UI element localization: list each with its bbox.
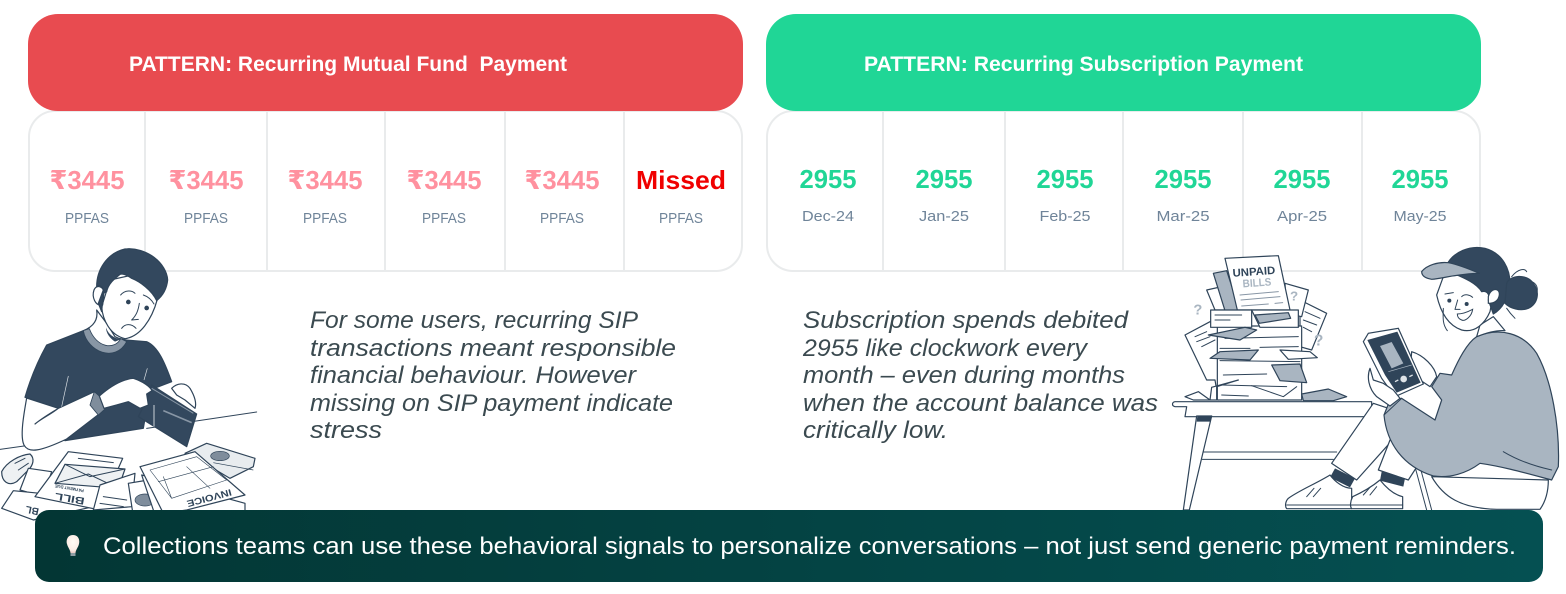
- text block: subscription insight: Subscription spends debited: [803, 307, 1129, 334]
- month cell 3: ₹3445: [288, 165, 362, 195]
- hips: [1432, 477, 1548, 509]
- bills and envelope: BILL: [54, 490, 86, 506]
- month cell Dec-24: 2955: [800, 164, 856, 194]
- heading: mutual fund pattern: PATTERN: Recurring Mutual Fund Payment: [129, 53, 567, 76]
- facial features: [1445, 293, 1473, 320]
- ear: [1488, 290, 1499, 303]
- arm left: [22, 392, 100, 450]
- phone with N logo and player: [1363, 328, 1423, 406]
- panel: subscription table: [767, 111, 1480, 271]
- month cell 1: PPFAS: [65, 210, 109, 227]
- month cell 4: [406, 165, 482, 227]
- icon: light bulb: [67, 535, 79, 556]
- neck: [83, 310, 126, 348]
- bills stack: [1185, 256, 1347, 401]
- month cell 2: PPFAS: [184, 210, 228, 227]
- bills stack: ?: [1193, 303, 1202, 319]
- shirt: [25, 331, 172, 441]
- month cell 2: ₹3445: [168, 165, 244, 195]
- table: [1172, 402, 1432, 510]
- month cell 4: ₹3445: [406, 165, 482, 195]
- ear: [93, 287, 104, 305]
- month cell Jan-25: Jan-25: [919, 208, 969, 225]
- month cell Feb-25: 2955: [1036, 164, 1094, 194]
- month cell 2: [168, 165, 244, 227]
- month cell Apr-25: 2955: [1274, 164, 1330, 194]
- stack of cash: [185, 443, 255, 478]
- month cell Apr-25: [1274, 164, 1330, 225]
- text block: subscription insight: [802, 307, 1158, 444]
- month cell Jan-25: [916, 164, 972, 225]
- text block: subscription insight: critically low.: [803, 417, 948, 444]
- month cell 1: ₹3445: [50, 165, 124, 195]
- text block: subscription insight: 2955 like clockwork every: [802, 335, 1089, 362]
- sweater: [1384, 332, 1559, 480]
- month cell Apr-25: Apr-25: [1277, 208, 1327, 225]
- face: [102, 273, 157, 339]
- phone hand right: [1410, 352, 1437, 387]
- bills and envelope: PAYMENT DUE: [54, 483, 84, 493]
- bills stack: BILLS: [1242, 276, 1272, 290]
- month cell Jan-25: 2955: [916, 164, 972, 194]
- neck and face: [1477, 317, 1505, 337]
- text block: SIP insight: missing on SIP payment indicate: [310, 390, 673, 417]
- month cell Feb-25: Feb-25: [1040, 208, 1090, 225]
- month cell Feb-25: [1036, 164, 1094, 225]
- hair: [97, 249, 168, 312]
- bills stack: UNPAID: [1232, 265, 1276, 280]
- text block: subscription insight: when the account balance was: [803, 390, 1158, 417]
- callout banner: [35, 510, 1543, 582]
- month cell Dec-24: [800, 164, 856, 225]
- wristband: [90, 392, 105, 415]
- text block: SIP insight: financial behaviour. However: [310, 362, 637, 389]
- month cell 6: missed payment: PPFAS: [659, 210, 703, 227]
- hair: [1447, 247, 1510, 314]
- heading: subscription pattern: [766, 14, 1481, 111]
- month cell May-25: 2955: [1392, 164, 1448, 194]
- eyebrows, eyes, mouth: [121, 291, 154, 328]
- month cell 3: [288, 165, 362, 227]
- hair bun: [1505, 276, 1537, 310]
- month cell 5: ₹3445: [524, 165, 600, 195]
- month cell Dec-24: Dec-24: [802, 208, 854, 225]
- text block: SIP insight: [310, 307, 676, 444]
- text block: SIP insight: transactions meant responsible: [310, 335, 676, 362]
- text block: SIP insight: stress: [310, 417, 382, 444]
- scroll of paper: [2, 454, 33, 484]
- month cell 5: [524, 165, 600, 227]
- month cell 1: [50, 165, 124, 227]
- hand on wallet back: [172, 384, 196, 408]
- shirt fold: [62, 368, 147, 407]
- cap brim: [1422, 262, 1479, 279]
- bills and envelope: BL: [25, 503, 40, 516]
- collar: [83, 329, 127, 353]
- month cell 5: PPFAS: [540, 210, 584, 227]
- month cell Mar-25: Mar-25: [1156, 208, 1210, 225]
- text block: subscription insight: month – even during months: [803, 362, 1125, 389]
- month cell 3: PPFAS: [303, 210, 347, 227]
- month cell 6: missed payment: Missed: [636, 165, 726, 195]
- month cell May-25: May-25: [1394, 208, 1446, 225]
- receipt with coin: [128, 480, 167, 517]
- month cell Mar-25: [1154, 164, 1212, 225]
- heading: mutual fund pattern: [28, 14, 743, 111]
- month cell 6: missed payment: [636, 165, 726, 227]
- hand on wallet front: [99, 378, 152, 408]
- bills and envelope: [2, 452, 135, 520]
- invoice stack: INVOICE: [186, 487, 233, 509]
- far leg and shoes: [1286, 403, 1423, 509]
- month cell Mar-25: 2955: [1154, 164, 1212, 194]
- illustration: worried man with empty wallet and bills: [0, 249, 257, 520]
- illustration: woman with phone and unpaid bills stack: [1172, 247, 1559, 510]
- invoice stack: [140, 452, 245, 520]
- month cell 4: PPFAS: [422, 210, 466, 227]
- bills stack: ?: [1314, 332, 1323, 349]
- wallet: [138, 385, 197, 447]
- heading: subscription pattern: PATTERN: Recurring Subscription Payment: [864, 53, 1303, 76]
- text block: SIP insight: For some users, recurring SIP: [310, 307, 638, 334]
- month cell May-25: [1392, 164, 1448, 225]
- callout banner: Collections teams can use these behavioral signals to personalize conversations – not just send generic payment reminders.: [103, 533, 1516, 560]
- panel: mutual fund table: [29, 111, 742, 271]
- bills stack: ?: [1290, 289, 1298, 304]
